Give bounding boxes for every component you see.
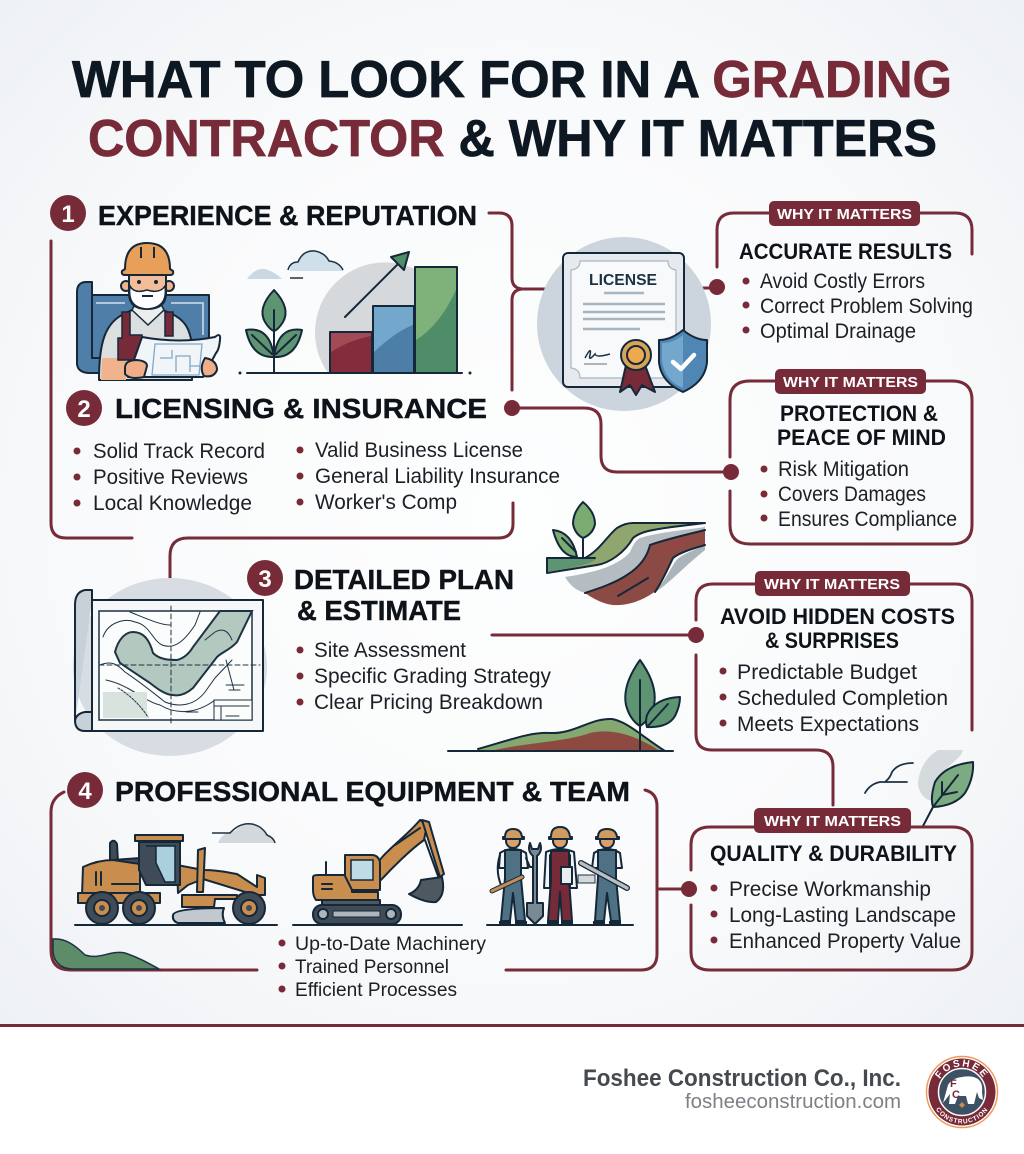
panel: why it matters 2 protection xyxy=(723,369,972,544)
badge: WHY IT MATTERS xyxy=(764,576,900,593)
frame xyxy=(691,827,972,970)
bullet list: licensing: Valid Business License xyxy=(315,439,523,462)
icon: motor grader xyxy=(75,824,277,925)
heading: protection and peace of mind xyxy=(777,401,946,450)
bullet list: Meets Expectations xyxy=(737,713,919,736)
heading: protection and peace of mind: PROTECTION & xyxy=(780,401,938,426)
heading: quality and durability: QUALITY & DURABILITY xyxy=(710,841,957,866)
bullet list: Covers Damages xyxy=(778,483,926,506)
panel: why it matters 4 quality and durability xyxy=(681,808,972,970)
frame xyxy=(730,381,972,544)
bullet list xyxy=(742,270,973,343)
icon: growth chart with plant xyxy=(238,251,472,374)
bullet list: experience: Solid Track Record xyxy=(93,440,265,463)
connector dot xyxy=(681,881,697,897)
panel: why it matters 1 accurate results xyxy=(717,201,973,343)
number badge 4 xyxy=(67,772,103,808)
bullet list: Long-Lasting Landscape xyxy=(729,904,956,927)
heading: experience and reputation: EXPERIENCE & REPUTATION xyxy=(98,200,477,231)
panel: section 4 professional equipment and team xyxy=(51,772,657,1001)
number badge 1 xyxy=(50,195,86,231)
number badge 3: 3 xyxy=(258,566,272,593)
worker right xyxy=(581,829,627,924)
heading: detailed plan and estimate xyxy=(294,564,514,626)
saw xyxy=(578,875,595,883)
connector dot: license xyxy=(709,279,725,295)
bullet list: Trained Personnel xyxy=(295,957,449,978)
bullet list: Up-to-Date Machinery xyxy=(295,934,487,955)
frame xyxy=(717,213,972,267)
bullet list xyxy=(296,639,551,714)
title: CONTRACTOR & WHY IT MATTERS xyxy=(88,110,937,168)
connector dot xyxy=(723,464,739,480)
badge xyxy=(754,808,911,833)
panel: section 1 experience and reputation xyxy=(50,195,477,380)
bullet list: Ensures Compliance xyxy=(778,508,957,531)
number badge 2 xyxy=(66,390,102,426)
footer background xyxy=(0,1026,1024,1154)
badge xyxy=(755,571,910,596)
logo: Foshee Construction: F xyxy=(950,1078,957,1090)
heading: detailed plan and estimate: DETAILED PLAN xyxy=(294,564,514,595)
bullet list: experience: Local Knowledge xyxy=(93,492,252,515)
icon: graded soil cross-section with sprout xyxy=(547,502,705,605)
connector dot xyxy=(688,627,704,643)
panel: why it matters 3 avoid hidden costs xyxy=(688,571,972,736)
icon: work crew with tools xyxy=(487,827,633,925)
heading: detailed plan and estimate: & ESTIMATE xyxy=(297,595,461,626)
bullet list: licensing: General Liability Insurance xyxy=(315,465,560,488)
heading: professional equipment and team: PROFESSIONAL EQUIPMENT & TEAM xyxy=(115,776,630,807)
icon: leaf and birds xyxy=(865,750,973,826)
bullet list: licensing xyxy=(296,439,560,514)
heading: licensing and insurance: LICENSING & INSURANCE xyxy=(115,393,487,424)
icon: hill with leaves xyxy=(448,660,680,751)
bullet list xyxy=(710,878,961,953)
number badge 3 xyxy=(247,560,283,596)
bullet list xyxy=(720,661,948,736)
icon: excavator xyxy=(293,820,462,925)
badge xyxy=(769,201,920,226)
title xyxy=(72,51,952,168)
footer xyxy=(0,1024,1024,1128)
number badge 1: 1 xyxy=(61,201,75,228)
bullet list xyxy=(760,458,957,531)
bullet list: licensing: Worker's Comp xyxy=(315,491,457,514)
icon: site plan map xyxy=(73,578,267,756)
bullet list: Avoid Costly Errors xyxy=(760,270,925,293)
badge: WHY IT MATTERS xyxy=(783,374,918,391)
bullet list: experience: Positive Reviews xyxy=(93,466,248,489)
icon: foreman with blueprint xyxy=(77,243,220,380)
badge: WHY IT MATTERS xyxy=(777,206,912,223)
worker left xyxy=(492,829,537,924)
logo: Foshee Construction xyxy=(926,1056,998,1128)
badge xyxy=(775,369,926,394)
number badge 4: 4 xyxy=(78,778,92,805)
heading: avoid hidden costs: & SURPRISES xyxy=(765,628,899,653)
connector dot xyxy=(504,400,520,416)
bullet list: Scheduled Completion xyxy=(737,687,948,710)
footer rule xyxy=(0,1024,1024,1027)
heading: accurate results: ACCURATE RESULTS xyxy=(739,239,952,264)
logo: Foshee Construction: C xyxy=(952,1089,960,1101)
icon: hill corner xyxy=(53,939,159,969)
bullet list: Efficient Processes xyxy=(295,980,457,1001)
logo: Foshee Construction: CONSTRUCTION xyxy=(936,1108,988,1124)
panel: section 3 detailed plan and estimate xyxy=(73,560,680,756)
icon: license certificate with seal and shield xyxy=(537,237,711,411)
bullet list: Precise Workmanship xyxy=(729,878,931,901)
bullet list: Risk Mitigation xyxy=(778,458,909,481)
logo: Foshee Construction: FOSHEE xyxy=(934,1060,988,1079)
badge: WHY IT MATTERS xyxy=(764,813,901,830)
bullet list: Specific Grading Strategy xyxy=(314,665,551,688)
bullet list: experience xyxy=(74,440,265,515)
company name: Foshee Construction Co., Inc. xyxy=(583,1065,901,1092)
frame xyxy=(696,584,972,730)
panel: section 2 licensing and insurance xyxy=(66,390,560,515)
shovel and wrench xyxy=(527,843,543,924)
heading: protection and peace of mind: PEACE OF MIND xyxy=(777,425,946,450)
bullet list: Predictable Budget xyxy=(737,661,917,684)
title: WHAT TO LOOK FOR IN A GRADING xyxy=(72,51,952,109)
bullet list: Correct Problem Solving xyxy=(760,295,973,318)
number badge 2: 2 xyxy=(77,396,91,423)
icon: license certificate with seal and shield: LICENSE xyxy=(589,272,657,289)
bullet list: Enhanced Property Value xyxy=(729,930,961,953)
heading: avoid hidden costs xyxy=(720,604,955,653)
divider line xyxy=(316,750,442,752)
bullet list xyxy=(278,934,487,1001)
bullet list: Site Assessment xyxy=(314,639,466,662)
bullet list: Clear Pricing Breakdown xyxy=(314,691,543,714)
heading: avoid hidden costs: AVOID HIDDEN COSTS xyxy=(720,604,955,629)
panel: main left connectors xyxy=(51,213,833,889)
worker centre xyxy=(544,827,577,924)
frame xyxy=(51,790,657,970)
bullet list: Optimal Drainage xyxy=(760,320,916,343)
website: fosheeconstruction.com xyxy=(685,1091,901,1113)
